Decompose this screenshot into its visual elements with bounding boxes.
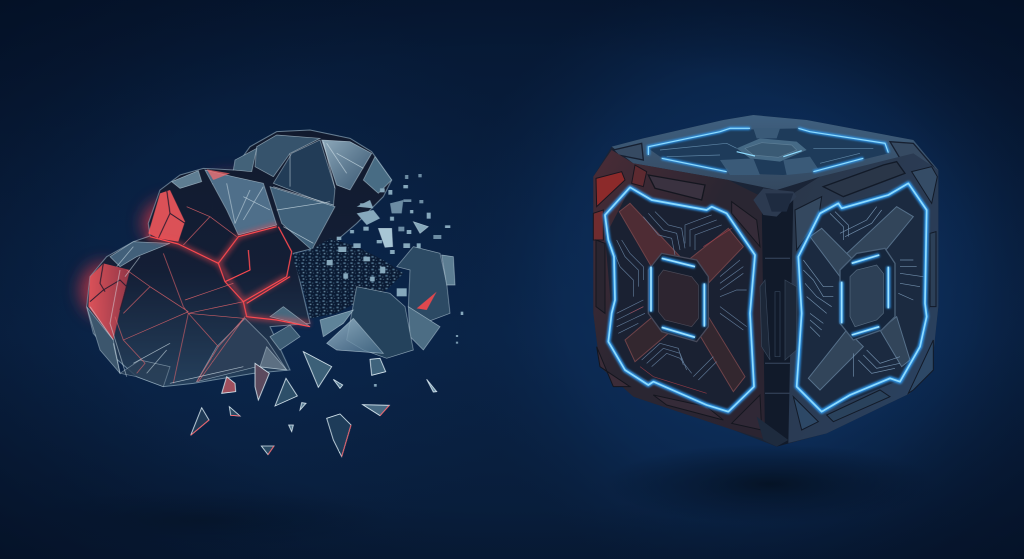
flying debris chunks [327, 174, 463, 387]
left face neon outline [605, 187, 755, 412]
right face [787, 153, 938, 443]
circuit traces right [803, 207, 923, 377]
top face [612, 115, 938, 190]
circuit traces left [612, 212, 747, 380]
shattered glass cloud [80, 130, 463, 457]
glowing red cracks [115, 207, 310, 383]
X brace [619, 203, 745, 392]
left center neon bars [651, 258, 704, 337]
center vertical corner column [753, 188, 797, 447]
falling glass shards [191, 352, 437, 457]
disintegrating pixel region [292, 238, 403, 318]
left cloud body: dark glass [87, 130, 392, 387]
red spot on right lobe [417, 292, 437, 310]
fine dark fractures on red panes [90, 190, 185, 310]
right face neon outline [797, 183, 927, 412]
dark inset panel [797, 185, 930, 412]
dark inset panel [605, 188, 753, 412]
top face corner blocks [613, 142, 933, 167]
center hex frame [840, 248, 895, 340]
right cloud lobe glass shards [320, 222, 455, 358]
top face neon outline [648, 128, 888, 172]
center hex frame [648, 253, 708, 342]
right center neon bars [842, 255, 888, 335]
red corner panels [596, 172, 625, 207]
armored tech cube [593, 115, 938, 447]
red glow behind cloud [80, 173, 260, 317]
cube silhouette [593, 115, 938, 447]
red edge highlights on shards [191, 405, 389, 457]
left face [593, 150, 767, 440]
pale glass panes [87, 135, 392, 387]
red lit panes [88, 169, 230, 340]
X brace [808, 207, 913, 390]
pale fracture lines on glass [90, 142, 363, 383]
